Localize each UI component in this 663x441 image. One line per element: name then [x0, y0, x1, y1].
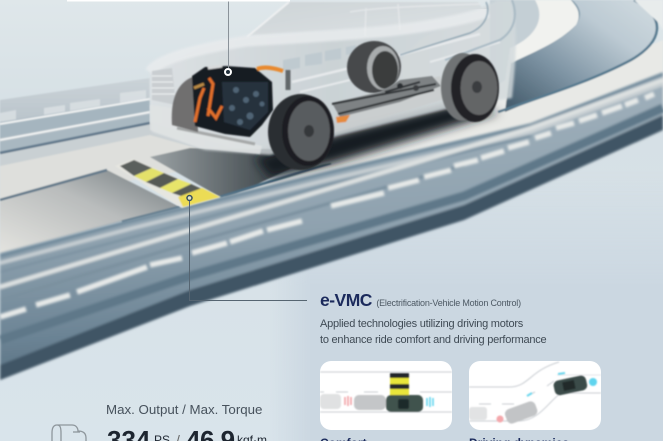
rear tire [441, 53, 499, 122]
dark shadow under car [255, 104, 500, 178]
car body translucent [150, 0, 516, 155]
far wall [0, 78, 150, 153]
front tire [268, 94, 334, 170]
guard barrier [0, 72, 663, 380]
description text [320, 318, 546, 346]
stat: output and torque values [107, 425, 267, 441]
card: driving dynamics diagram [469, 361, 601, 430]
callout lines and markers [187, 0, 307, 300]
road surface [0, 0, 663, 254]
curved track [290, 0, 657, 170]
icon: engine motor [51, 424, 87, 441]
top white box edge [67, 0, 290, 2]
card: comfort diagram [320, 361, 452, 430]
heading: e-VMC: e-VMC (Electrification-Vehicle Motion Control) [320, 290, 521, 310]
engine bay [172, 66, 288, 137]
speed bump [115, 159, 221, 208]
rear far tire [345, 39, 403, 95]
lower right panel tint [292, 244, 663, 441]
text: max output label: Max. Output / Max. Torque [106, 402, 262, 417]
barrier window dashes [0, 94, 654, 317]
description text: to enhance ride comfort and driving performance [320, 334, 546, 346]
chassis [330, 76, 448, 134]
description text: Applied technologies utilizing driving motors [320, 318, 523, 330]
